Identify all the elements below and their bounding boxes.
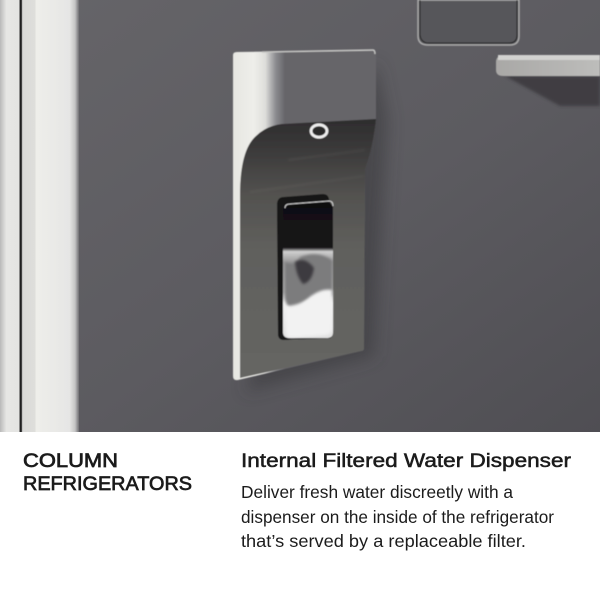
wall shelf xyxy=(496,55,600,106)
description line 1: Deliver fresh water discreetly with a xyxy=(241,482,513,502)
description line 2: dispenser on the inside of the refrigerator xyxy=(241,507,554,527)
top block highlight xyxy=(262,50,375,54)
heading: refrigerators line two: REFRIGERATORS xyxy=(23,474,192,495)
water dispenser panel xyxy=(233,50,376,380)
refrigerator wall xyxy=(0,0,600,432)
description line 3: that’s served by a replaceable filter. xyxy=(241,531,526,551)
face reflection bands xyxy=(250,150,365,192)
heading: column refrigerators: COLUMN xyxy=(23,451,118,472)
caption band xyxy=(0,432,600,600)
dispenser button recess xyxy=(277,194,331,340)
upper panel on wall xyxy=(418,0,519,45)
photo: refrigerator interior xyxy=(0,0,600,432)
panel recessed face xyxy=(240,119,376,378)
panel body xyxy=(233,50,376,380)
door frame xyxy=(0,0,79,432)
water outlet ring xyxy=(311,125,327,137)
feature title: Internal Filtered Water Dispenser xyxy=(241,451,572,472)
dispenser shadow xyxy=(245,60,388,392)
chrome dispenser button xyxy=(283,201,333,338)
